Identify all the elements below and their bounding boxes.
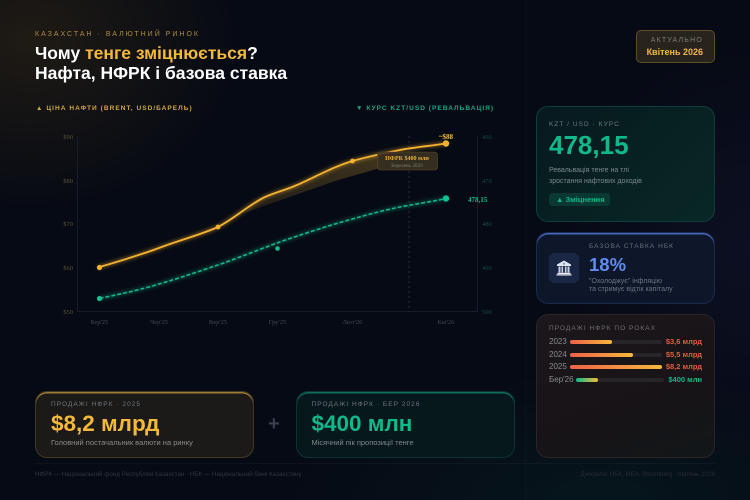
row March 2026: Бер'26 [549, 374, 574, 384]
x axis labels: Бер'25 [91, 319, 108, 326]
title [35, 43, 288, 83]
x axis labels: Лют'26 [343, 319, 363, 326]
panel heading: ПРОДАЖІ НФРК ПО РОКАХ [549, 324, 656, 332]
label: ПРОДАЖІ НФРК · БЕР 2026 [312, 401, 421, 408]
legend: exchange rate: ▼ КУРС KZT/USD (РЕВАЛЬВАЦІЯ) [356, 105, 494, 112]
left axis labels: $60 [63, 265, 73, 272]
description: Ревальвація тенге на тлі [549, 167, 629, 174]
date badge: АКТУАЛЬНО [651, 37, 703, 44]
description [549, 166, 642, 185]
rate points [97, 195, 449, 301]
left axis labels [63, 134, 73, 316]
date badge [636, 30, 715, 63]
footer sources: Джерела: НБК, МБА, Bloomberg · Квітень 2026 [580, 471, 715, 478]
row March 2026: $400 млн [668, 374, 702, 384]
left axis labels: $90 [63, 134, 73, 141]
end label rate: 478,15 [468, 196, 488, 204]
x axis labels: Гру'25 [269, 319, 286, 326]
description [589, 278, 673, 292]
callout: Березень 2026 [391, 163, 423, 169]
description: Місячний пік пропозиції тенге [312, 438, 414, 447]
row 2024 [549, 350, 702, 358]
rate line [100, 198, 446, 298]
label: KZT / USD · КУРС [549, 121, 620, 128]
label: ПРОДАЖІ НФРК · 2025 [51, 401, 141, 408]
oil line [100, 144, 446, 267]
title: Нафта, НФРК і базова ставка [35, 63, 287, 83]
left axis labels: $80 [63, 178, 73, 185]
x axis labels: Кві'26 [438, 319, 455, 326]
callout [378, 152, 438, 170]
date badge: Квітень 2026 [647, 47, 703, 57]
stat card: March 2026 sales [296, 391, 515, 458]
right axis labels: 470 [482, 178, 492, 185]
label: БАЗОВА СТАВКА НБК [589, 243, 674, 250]
legend: oil price: ▲ ЦІНА НАФТИ (BRENT, USD/БАРЕЛЬ) [36, 105, 193, 112]
x axis labels [91, 319, 455, 326]
panel: base rate [536, 232, 715, 304]
right axis labels [482, 134, 492, 316]
description: та стримує відтік капіталу [589, 286, 673, 292]
value: 478,15 [549, 130, 629, 160]
eyebrow: КАЗАХСТАН · ВАЛЮТНИЙ РИНОК [35, 30, 200, 38]
x axis labels: Чер'25 [150, 319, 168, 326]
oil area [244, 154, 380, 213]
oil points [97, 140, 449, 270]
icon: bank [549, 253, 579, 283]
badge: ▲ Зміцнення [556, 195, 605, 204]
row 2025: $8,2 млрд [666, 362, 702, 371]
badge [549, 193, 610, 206]
description: Головний постачальник валюти на ринку [51, 438, 193, 447]
description: "Охолоджує" інфляцію [589, 278, 662, 284]
callout: НФРК $400 млн [385, 155, 429, 162]
right axis labels: 480 [482, 221, 492, 228]
right axis labels: 460 [482, 134, 492, 141]
value: $8,2 млрд [51, 411, 159, 436]
row 2025: 2025 [549, 362, 567, 371]
footer note: НФРК — Національний фонд Республіки Казахстан · НБК — Національний банк Казахстану [35, 471, 302, 478]
row 2024: 2024 [549, 350, 567, 358]
row 2024: $5,5 млрд [666, 350, 702, 358]
right axis labels: 490 [482, 265, 492, 272]
title: Чому тенге зміцнюється? [35, 43, 258, 63]
left axis labels: $70 [63, 221, 73, 228]
panel: sales by year [536, 314, 715, 458]
plus sign: + [268, 413, 280, 435]
end label oil: ~$88 [439, 133, 454, 141]
line chart [63, 133, 492, 326]
row 2023: 2023 [549, 337, 567, 346]
x axis labels: Вер'25 [209, 319, 227, 326]
row March 2026 [549, 374, 702, 384]
value: $400 млн [312, 411, 412, 436]
description: зростання нафтових доходів [549, 178, 642, 185]
panel: exchange rate [536, 106, 715, 222]
right axis labels: 500 [482, 309, 492, 316]
left axis labels: $50 [63, 309, 73, 316]
stat card: 2025 sales [35, 391, 254, 458]
row 2025 [549, 362, 702, 371]
value: 18% [589, 254, 626, 275]
row 2023 [549, 337, 702, 346]
row 2023: $3,6 млрд [666, 337, 702, 346]
